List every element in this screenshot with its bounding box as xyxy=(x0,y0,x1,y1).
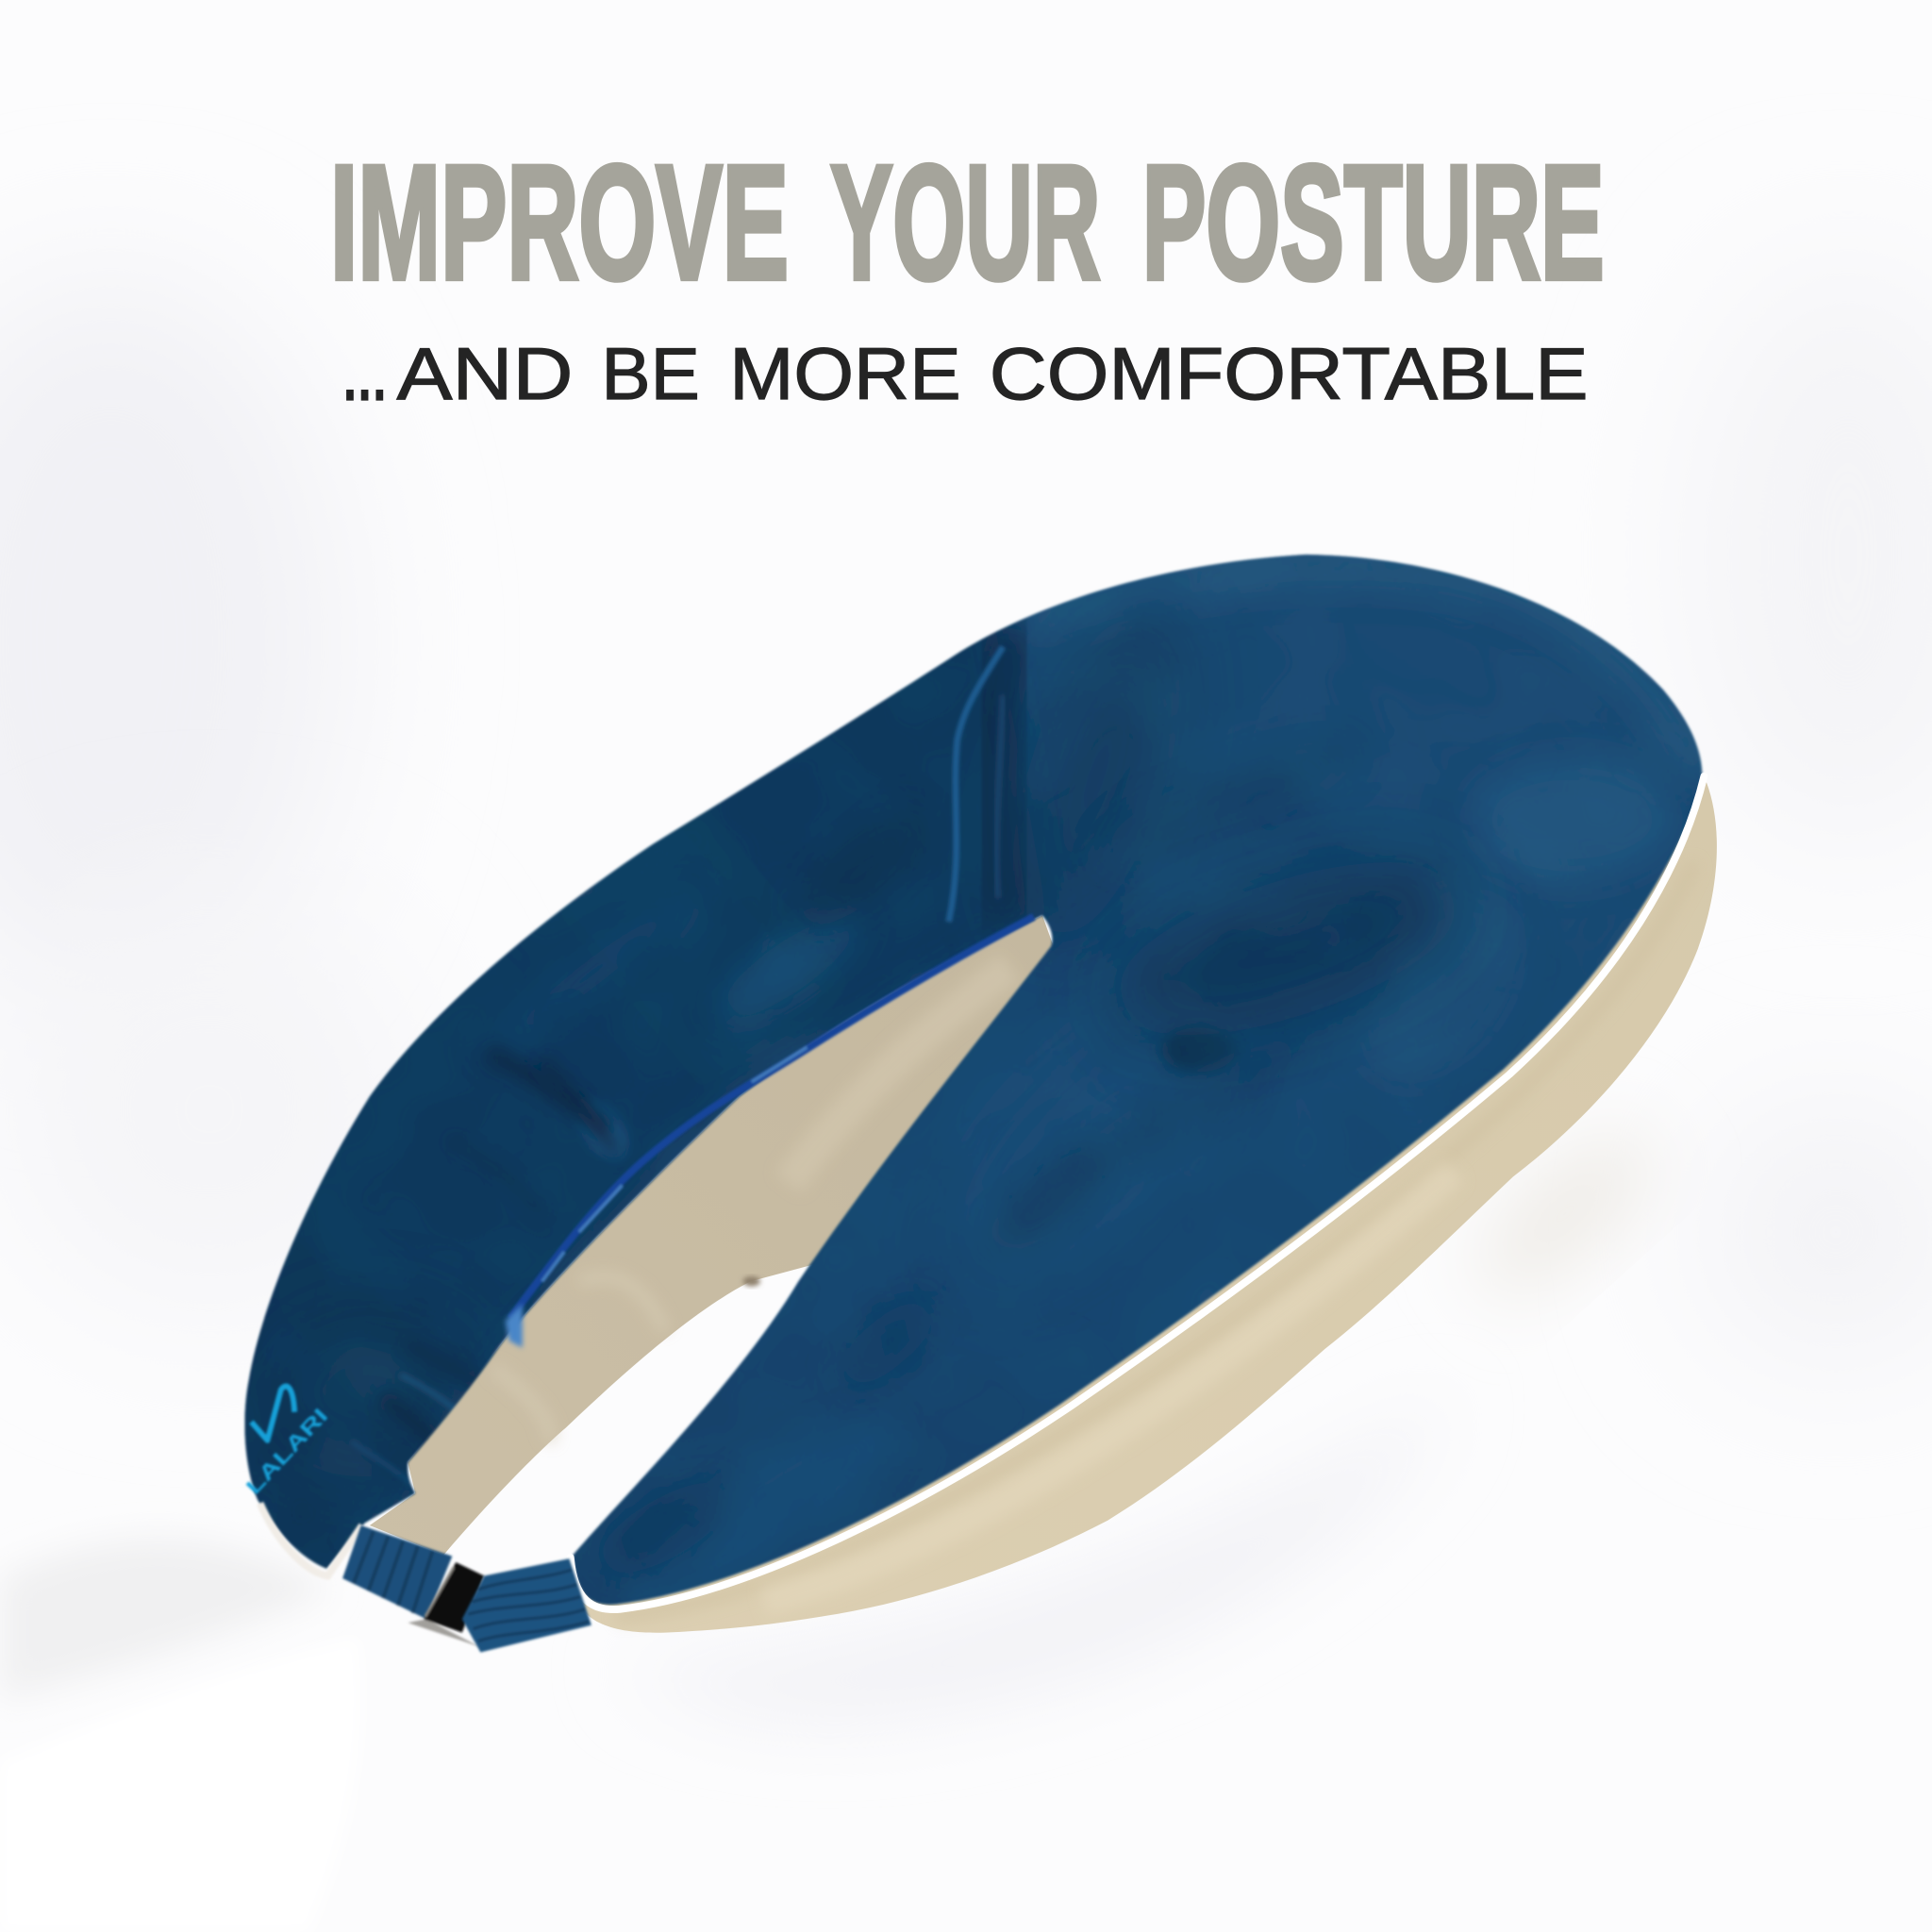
back lobe darker velvet xyxy=(209,579,1047,1602)
zipper xyxy=(510,917,1034,1319)
cloudy velvet texture xyxy=(313,627,1640,1606)
beige side panel, right lobe xyxy=(579,782,1717,1633)
embroidered logo xyxy=(242,1386,332,1499)
neck pillow xyxy=(185,518,1762,1653)
white piping, left lobe xyxy=(260,1503,362,1576)
strap: metal buckle xyxy=(408,1562,484,1647)
zipper end tab xyxy=(506,1304,523,1348)
gathered seam xyxy=(949,647,1003,922)
title: YOUR xyxy=(830,131,1100,313)
title xyxy=(330,131,1605,313)
wrinkles xyxy=(488,1052,608,1130)
inner crease between lobes xyxy=(991,628,1017,918)
title: POSTURE xyxy=(1142,131,1605,313)
subtitle: AND xyxy=(397,332,573,415)
white piping, right lobe xyxy=(571,776,1704,1609)
subtitle xyxy=(342,332,1589,415)
subtitle: COMFORTABLE xyxy=(990,332,1589,415)
title: IMPROVE xyxy=(330,131,789,313)
beige inner panel, back lobe xyxy=(370,915,1054,1555)
strap: left elastic band xyxy=(342,1525,452,1619)
strap: right elastic band xyxy=(462,1558,591,1653)
embroidered logo: LALARI xyxy=(242,1404,332,1499)
subtitle: MORE xyxy=(729,332,961,415)
blue velvet body xyxy=(243,553,1704,1606)
subtitle: BE xyxy=(601,332,700,415)
velvet dark patches xyxy=(979,591,1214,961)
velvet highlights xyxy=(990,557,1680,740)
subtitle: ... xyxy=(342,332,387,415)
